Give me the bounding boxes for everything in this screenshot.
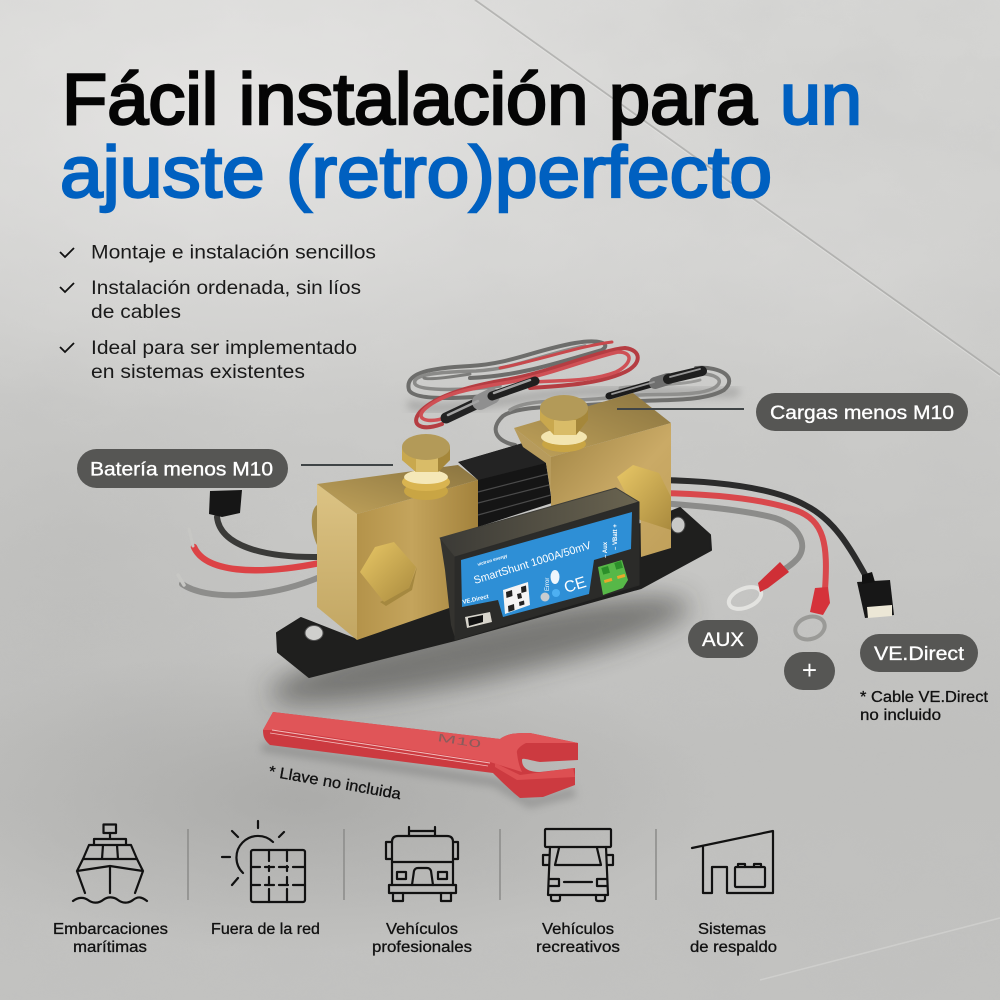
title: ajuste (retro)perfecto bbox=[60, 133, 772, 213]
label: Vehículos profesionales: Vehículos bbox=[386, 921, 458, 938]
label text: CE bbox=[562, 574, 588, 597]
fuse holder right bbox=[609, 369, 702, 396]
VE.Direct port bbox=[465, 612, 492, 628]
label: Sistemas de respaldo: de respaldo bbox=[690, 939, 777, 956]
connector: left black plug bbox=[209, 490, 242, 517]
base screws bbox=[305, 626, 323, 640]
title bbox=[60, 60, 862, 213]
label text: Error bbox=[545, 578, 551, 591]
wrench bbox=[263, 712, 578, 798]
cables right side: aux, positive, VE.Direct bbox=[660, 480, 868, 590]
label: Embarcaciones marítimas: Embarcaciones bbox=[53, 921, 168, 938]
LEDs bbox=[540, 592, 550, 602]
item: montaje: Montaje e instalación sencillos bbox=[91, 242, 376, 264]
base plate bbox=[277, 508, 711, 677]
item: instalación ordenada bbox=[60, 277, 361, 323]
cables behind the shunt: grey and red loops with fuse holders bbox=[408, 341, 735, 445]
label: Sistemas de respaldo: Sistemas bbox=[698, 921, 766, 938]
left brass block bbox=[312, 465, 478, 640]
title: Fácil instalación para bbox=[62, 60, 758, 140]
pill: plus: + bbox=[802, 655, 817, 685]
QR code bbox=[503, 582, 530, 614]
item: ideal: en sistemas existentes bbox=[91, 361, 305, 383]
pill: Cargas menos M10 bbox=[756, 393, 968, 431]
divider decoration bbox=[188, 829, 656, 900]
title: un bbox=[780, 60, 862, 140]
note: VE.Direct cable: no incluido bbox=[860, 707, 941, 724]
label text: – Aux bbox=[603, 541, 609, 558]
icon: solar panel with sun bbox=[222, 821, 305, 902]
pill: plus bbox=[784, 652, 835, 690]
leader line: battery bbox=[301, 464, 393, 466]
label text: victron energy bbox=[477, 553, 508, 567]
label: Embarcaciones marítimas: marítimas bbox=[73, 939, 147, 956]
blue label bbox=[461, 512, 632, 617]
ring terminal: AUX bbox=[726, 562, 789, 613]
connector: VE.Direct bbox=[857, 572, 894, 618]
right top nut bbox=[540, 395, 588, 452]
pill: Cargas menos M10: Cargas menos M10 bbox=[770, 402, 954, 424]
heat sink bbox=[458, 443, 552, 527]
front right bolt bbox=[617, 465, 671, 530]
item: ideal bbox=[60, 337, 357, 383]
label: Sistemas de respaldo bbox=[690, 921, 777, 956]
cables left side bbox=[178, 517, 320, 595]
pill: Batería menos M10 bbox=[77, 449, 288, 488]
pill: VE.Direct bbox=[860, 634, 978, 672]
item: instalación ordenada: Instalación ordenada, sin líos bbox=[91, 277, 361, 299]
pill: Batería menos M10: Batería menos M10 bbox=[90, 458, 273, 480]
label text: SmartShunt 1000A/50mV bbox=[472, 540, 593, 587]
pill: VE.Direct: VE.Direct bbox=[874, 643, 965, 665]
label text bbox=[462, 524, 619, 606]
ring terminal: positive bbox=[792, 587, 830, 643]
icon: boat bbox=[73, 824, 147, 903]
label: Vehículos recreativos bbox=[536, 921, 620, 956]
label: Embarcaciones marítimas bbox=[53, 921, 168, 956]
label: Vehículos profesionales: profesionales bbox=[372, 939, 472, 956]
note: wrench not included: * Llave no incluida bbox=[267, 763, 403, 803]
icon: professional truck bbox=[386, 827, 458, 901]
green terminal bbox=[598, 560, 628, 595]
label: Vehículos recreativos: recreativos bbox=[536, 939, 620, 956]
feature list bbox=[60, 242, 376, 383]
front left bolt bbox=[360, 542, 417, 606]
label: Vehículos profesionales bbox=[372, 921, 472, 956]
wrench: M10 bbox=[437, 732, 482, 751]
pill: AUX bbox=[688, 620, 758, 658]
icon: recreational vehicle bbox=[543, 829, 613, 901]
pill: AUX: AUX bbox=[702, 629, 744, 651]
label: Fuera de la red: Fuera de la red bbox=[211, 921, 320, 938]
label text: – VBatt + bbox=[613, 524, 619, 550]
item: instalación ordenada: de cables bbox=[91, 301, 181, 323]
note: VE.Direct cable bbox=[860, 689, 989, 724]
wrench shadow bbox=[262, 747, 575, 803]
left top nut bbox=[402, 434, 450, 500]
fuse holder left bbox=[446, 380, 535, 418]
label: Vehículos recreativos: Vehículos bbox=[542, 921, 614, 938]
shunt shadow bbox=[263, 576, 697, 724]
item: ideal: Ideal para ser implementado bbox=[91, 337, 357, 359]
electronics module bbox=[440, 488, 639, 640]
label text: VE.Direct bbox=[462, 594, 489, 606]
right brass block bbox=[514, 393, 671, 557]
SmartShunt device bbox=[277, 393, 711, 677]
note: VE.Direct cable: * Cable VE.Direct bbox=[860, 689, 989, 706]
icon: backup system garage with battery bbox=[692, 831, 773, 893]
leader line: loads bbox=[617, 408, 744, 410]
